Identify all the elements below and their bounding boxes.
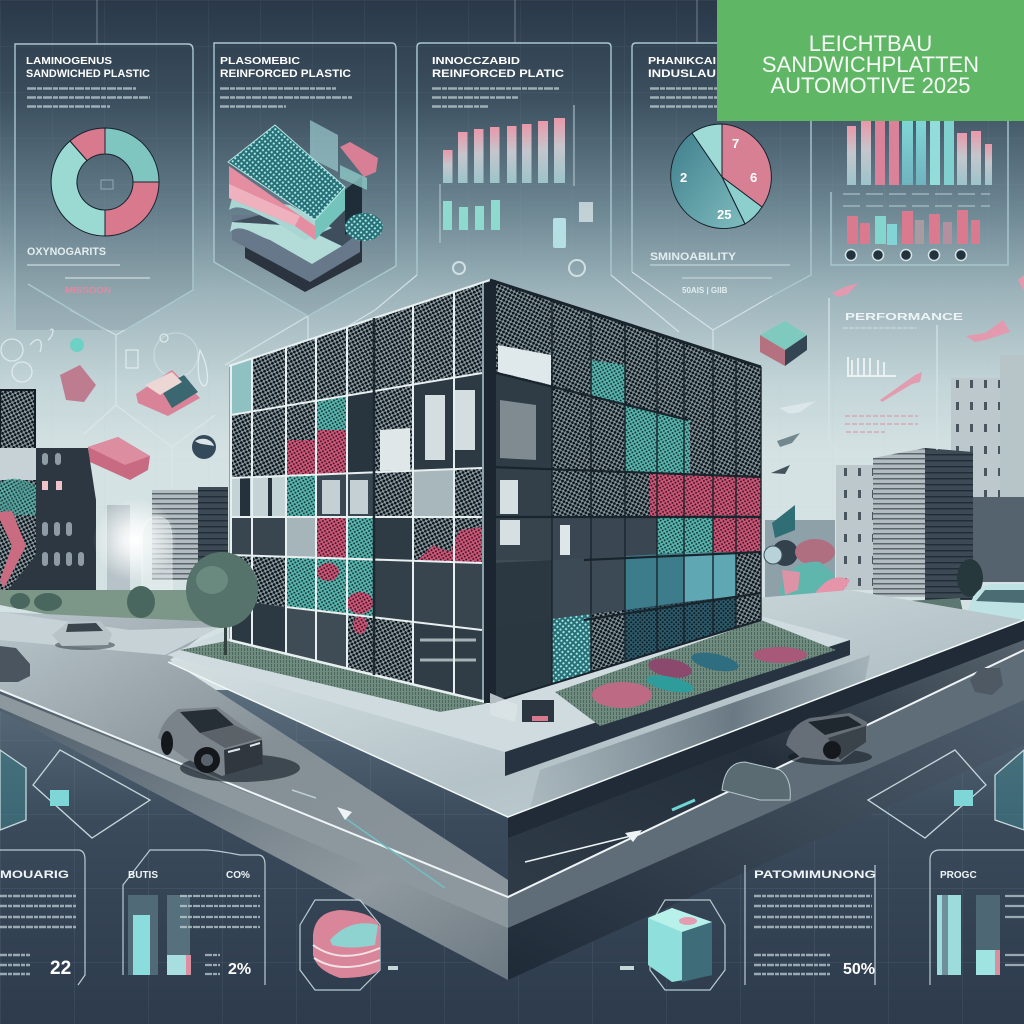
footer metric: 50AIS | GIIB bbox=[682, 286, 728, 295]
heading: panel one: LAMINOGENUS bbox=[26, 55, 112, 67]
panel: bottom right text bbox=[745, 865, 876, 985]
panel: bottom left text bbox=[0, 850, 85, 985]
car: far left bbox=[0, 646, 30, 682]
main glass building bbox=[229, 280, 761, 703]
right face mullions bbox=[490, 280, 761, 703]
shrubs bbox=[10, 586, 155, 618]
road and terrace system bbox=[0, 590, 1024, 980]
corner column bbox=[484, 280, 496, 703]
background block bbox=[765, 520, 835, 600]
middle terrace surface bbox=[168, 590, 1024, 817]
building: dark tower bbox=[8, 448, 96, 590]
icon: sandwich block bbox=[136, 370, 200, 416]
shrub bbox=[957, 559, 983, 597]
sun glare bbox=[93, 498, 177, 582]
upper bars bbox=[847, 121, 992, 185]
terrace shadow bbox=[530, 655, 870, 808]
right dark wedge bbox=[508, 700, 1024, 980]
panel: bottom far right bbox=[930, 850, 1024, 985]
mini chart bbox=[847, 357, 896, 376]
lower band right top bbox=[508, 650, 1024, 928]
road arrows bbox=[292, 790, 695, 888]
icon: sandwich block right bbox=[760, 321, 807, 366]
pie values: 2 bbox=[680, 170, 687, 185]
left face interior and panels bbox=[231, 283, 482, 701]
train bbox=[966, 584, 1024, 620]
foundation cutaway bbox=[490, 693, 554, 722]
donut chart bbox=[51, 128, 159, 236]
hex icon: pink stack bbox=[300, 900, 398, 990]
diamond left bbox=[0, 750, 150, 838]
glass arch bbox=[142, 517, 172, 590]
cars bbox=[0, 621, 1003, 800]
sub text line bbox=[843, 327, 917, 329]
glass pod bbox=[722, 762, 790, 800]
car: dark right bbox=[786, 713, 872, 765]
title banner: SANDWICHPLATTEN bbox=[762, 52, 979, 77]
bar stacked bbox=[167, 895, 190, 975]
icon cluster: small line icons bbox=[1, 329, 207, 386]
heading right: CO% bbox=[226, 870, 250, 881]
arrow: right road bbox=[525, 830, 642, 862]
icon: teal dot bbox=[70, 338, 84, 352]
car: small silver bbox=[52, 621, 115, 650]
middle terrace dark face bbox=[508, 620, 1024, 838]
building: textured lower front bbox=[0, 480, 36, 590]
pink arrow bbox=[880, 372, 922, 402]
panel: top right bar charts bbox=[831, 121, 1008, 265]
footer label: SMINOABILITY bbox=[650, 251, 737, 263]
legend lines bbox=[845, 416, 918, 432]
tree bbox=[186, 552, 258, 655]
panel: pie chart bbox=[632, 43, 811, 296]
heading: panel four: PHANIKCAI bbox=[648, 55, 716, 67]
lower light band left bbox=[0, 694, 508, 928]
icon: pink stack bbox=[88, 437, 150, 480]
flying grey markers bbox=[771, 401, 816, 474]
body copy lines bbox=[650, 88, 717, 106]
building: white front bbox=[0, 448, 36, 482]
pie values: 25 bbox=[717, 207, 731, 222]
right city block bbox=[760, 275, 1024, 640]
road background left bbox=[0, 612, 508, 900]
panel: layered plate bbox=[214, 43, 396, 316]
bar chart upper bbox=[443, 118, 565, 183]
subheading: panel two: REINFORCED PLASTIC bbox=[220, 68, 351, 80]
footer rule bbox=[27, 265, 150, 278]
value: 50% bbox=[843, 961, 875, 978]
lower grey wedge left bbox=[0, 690, 508, 980]
mid tower bbox=[836, 465, 873, 590]
panel: bottom bars left bbox=[123, 850, 265, 985]
subheading: panel one: SANDWICHED PLASTIC bbox=[26, 68, 150, 80]
diamond right bbox=[868, 750, 1024, 838]
flying pink markers bbox=[832, 275, 1024, 342]
chevron arrow bbox=[0, 511, 26, 588]
subheading: panel four: INDUSLAU bbox=[648, 68, 716, 80]
legend lines bbox=[1005, 896, 1024, 965]
cylinder gauge bbox=[553, 218, 566, 248]
left lawn bbox=[180, 640, 490, 712]
bottom panels bbox=[0, 850, 1024, 990]
ribbed building light side bbox=[873, 448, 925, 597]
car: silver front left bbox=[158, 707, 300, 782]
sky background bbox=[0, 0, 1024, 700]
bar stacked bbox=[976, 895, 1000, 975]
far tower bbox=[107, 505, 130, 590]
pie chart bbox=[671, 124, 771, 228]
lower bars bbox=[847, 210, 980, 245]
value: 2% bbox=[228, 961, 251, 978]
bar chart lower bbox=[443, 200, 500, 230]
panel: performance note bbox=[829, 298, 963, 458]
panel: bar chart bbox=[417, 43, 611, 276]
footer metric: MISSOON bbox=[65, 286, 111, 295]
car: far right bbox=[970, 668, 1003, 695]
far tower right bbox=[1000, 355, 1024, 560]
bar cyan bbox=[128, 895, 158, 975]
ribbed building dark side bbox=[925, 448, 973, 600]
left floating icons bbox=[1, 329, 216, 480]
pie values: 7 bbox=[732, 136, 739, 151]
small table icon bbox=[579, 202, 593, 222]
body copy bbox=[754, 896, 872, 974]
heading: PATOMIMUNONG bbox=[754, 869, 876, 881]
body copy lines bbox=[432, 88, 560, 106]
building: ribbed tower bbox=[152, 490, 198, 580]
value: 22 bbox=[50, 958, 71, 979]
round markers bbox=[846, 250, 966, 260]
axis rows bbox=[843, 194, 990, 206]
right lawn bbox=[555, 620, 836, 726]
hex icon: teal stack bbox=[620, 900, 725, 990]
lower dark background bbox=[0, 690, 1024, 1024]
grass right bbox=[830, 598, 965, 640]
body copy lines bbox=[220, 88, 352, 106]
body copy lines bbox=[27, 88, 150, 106]
road dash teal bbox=[672, 800, 695, 810]
grass bbox=[0, 590, 220, 630]
left city block bbox=[0, 390, 228, 630]
middle terrace light edge bbox=[168, 620, 1024, 817]
teal and pink sculptures bbox=[764, 505, 850, 625]
left face base bbox=[229, 280, 490, 703]
title banner bbox=[717, 0, 1024, 121]
diamonds left and right bbox=[0, 750, 1024, 838]
bar cyan bbox=[937, 895, 961, 975]
heading: MOUARIG bbox=[0, 869, 69, 881]
white road edge bbox=[0, 650, 1024, 897]
right face base bbox=[490, 280, 761, 703]
body copy bbox=[0, 896, 76, 974]
heading: panel two: PLASOMEBIC bbox=[220, 55, 300, 67]
pie values bbox=[680, 136, 757, 222]
legend lines bbox=[180, 896, 260, 974]
background grid bbox=[0, 0, 1024, 620]
donut centre icon bbox=[101, 180, 113, 189]
tall tower bbox=[951, 378, 1000, 498]
road band upper-left light stripe bbox=[0, 612, 220, 655]
low dark block bbox=[973, 497, 1024, 582]
flower beds bbox=[592, 647, 807, 708]
heading left: BUTIS bbox=[128, 870, 158, 881]
title banner: AUTOMOTIVE 2025 bbox=[770, 73, 971, 98]
connector lines between panels bbox=[70, 0, 772, 487]
title banner: LEICHTBAU bbox=[809, 31, 932, 56]
heading: PERFORMANCE bbox=[845, 311, 963, 323]
left face mullions bbox=[229, 280, 490, 703]
heading: PROGC bbox=[940, 870, 977, 881]
round icons bbox=[453, 260, 585, 276]
road dash grey bbox=[292, 790, 316, 798]
building: upper dark grid bbox=[0, 390, 35, 450]
pie values: 6 bbox=[750, 170, 757, 185]
road right dark bbox=[508, 625, 1024, 897]
inner plinth dark face bbox=[505, 640, 850, 776]
heading: panel three: INNOCCZABID bbox=[432, 55, 520, 67]
right face interior and panels bbox=[492, 281, 761, 703]
panel: laminate donut bbox=[15, 44, 193, 330]
icon: pink fragment bbox=[60, 365, 96, 402]
icon: sphere bbox=[192, 435, 216, 459]
footer label: OXYNOGARITS bbox=[27, 246, 106, 258]
axis bbox=[440, 105, 574, 243]
footer rule bbox=[650, 265, 790, 278]
illustration: layered sandwich panel bbox=[228, 120, 383, 292]
arrow: left road bbox=[337, 807, 445, 888]
inner plinth surface bbox=[167, 600, 850, 752]
bottom grid bbox=[0, 700, 1024, 1024]
subheading: panel three: REINFORCED PLATIC bbox=[432, 68, 564, 80]
